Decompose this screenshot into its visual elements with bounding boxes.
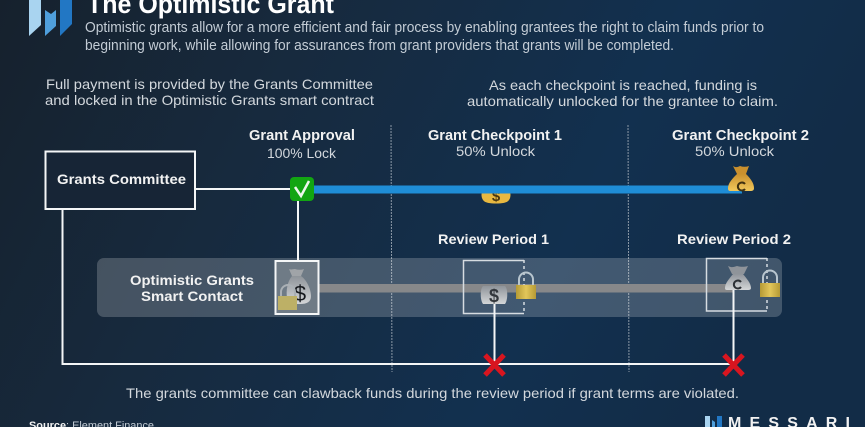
panel: smart contract [97,258,782,317]
icon: gold bag, checkpoint 2 [728,166,754,191]
box: locked money bag [276,261,318,314]
review period 1: Review Period 1 [438,231,549,247]
note: full payment: and locked in the Optimistic Grants smart contract [45,92,374,108]
icon: red cross 2 [724,355,743,375]
heading: checkpoint 1: Grant Checkpoint 1 [428,128,562,144]
note: checkpoints: automatically unlocked for the grantee to claim. [467,93,778,109]
panel: smart contract: Optimistic Grants [130,272,254,288]
icon: green check [290,177,314,201]
icon: red cross 1 [485,355,504,375]
note: checkpoints: As each checkpoint is reached, funding is [489,77,757,93]
bar: funding timeline [314,186,742,194]
icon: gold bag half, checkpoint 1: $ [492,188,501,205]
heading: checkpoint 2: Grant Checkpoint 2 [672,128,809,144]
note: clawback: The grants committee can clawback funds during the review period if grant terms are violated. [126,385,739,401]
box: locked money bag: $ [294,281,306,306]
bar: locked funds [319,284,733,292]
review period 1 [438,231,549,314]
heading: checkpoint 1: 50% Unlock [456,143,536,159]
review period 2 [677,231,791,311]
heading: checkpoint 2 [672,128,809,159]
heading: checkpoint 1 [428,128,562,159]
heading: checkpoint 2: 50% Unlock [695,143,775,159]
panel: smart contract: Smart Contact [141,288,243,304]
note: checkpoints [467,77,778,109]
heading: grant approval [249,128,355,161]
note: full payment [45,76,374,108]
clawback line [62,209,734,364]
dotted dividers [391,125,629,372]
note: full payment: Full payment is provided by the Grants Committee [46,76,373,92]
heading: grant approval: Grant Approval [249,128,355,144]
connector: committee to approval [195,188,292,190]
intro text: beginning work, while allowing for assurances from grant providers that grants will be completed. [85,38,674,54]
connectors: review to clawback [494,290,734,364]
box: grants committee [46,152,195,209]
icon: gold bag half, checkpoint 1 [482,188,510,205]
review period 2: Review Period 2 [677,231,791,247]
connector: approval to contract [297,199,299,268]
intro text [85,20,764,54]
logo: Messari mark [29,0,72,36]
review period 1: $ [489,286,499,306]
heading: grant approval: 100% Lock [267,145,337,161]
intro text: Optimistic grants allow for a more efficient and fair process by enabling grantees the right to claim funds prior to [85,20,764,36]
box: grants committee: Grants Committee [57,171,186,187]
